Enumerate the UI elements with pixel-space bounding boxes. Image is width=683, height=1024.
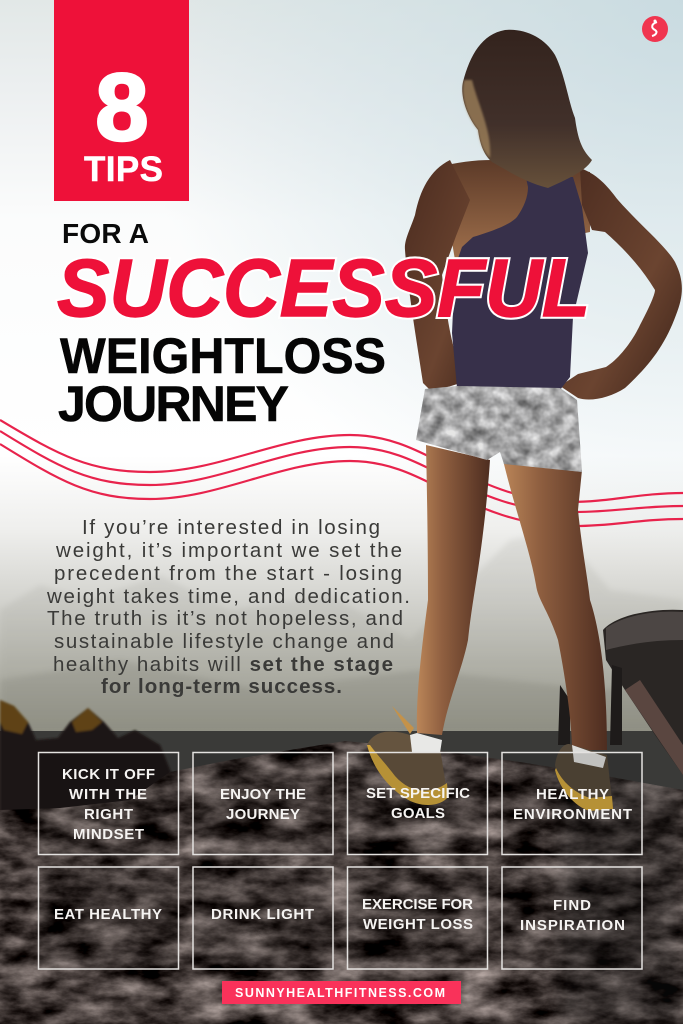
heading: for a: FOR A xyxy=(62,218,149,249)
left arm xyxy=(405,160,492,392)
tip 1: RIGHT xyxy=(84,806,133,823)
intro paragraph: weight takes time, and dedication. xyxy=(46,585,410,608)
right leg xyxy=(503,460,607,750)
intro paragraph: precedent from the start - losing xyxy=(54,562,402,585)
intro paragraph: sustainable lifestyle change and xyxy=(54,630,394,653)
tip 3 xyxy=(348,752,488,854)
woman figure xyxy=(367,30,682,811)
tip 8: FIND xyxy=(553,897,591,914)
tip grid xyxy=(38,752,642,969)
title badge: 8 tips: TIPS xyxy=(84,150,163,189)
footer url badge xyxy=(222,981,461,1004)
right shoe xyxy=(555,744,613,811)
tank top xyxy=(452,160,588,390)
dark horizon band xyxy=(0,731,683,811)
right arm xyxy=(560,168,682,400)
tip 4: ENVIRONMENT xyxy=(513,806,632,823)
intro paragraph: healthy habits will set the stage xyxy=(53,653,393,676)
tip 4 xyxy=(502,752,642,854)
tip 2: JOURNEY xyxy=(226,806,300,823)
tip 1: MINDSET xyxy=(73,826,144,843)
tip 1: KICK IT OFF xyxy=(62,766,155,783)
logo badge xyxy=(642,16,668,42)
rocks xyxy=(0,730,683,1024)
tip 7: EXERCISE FOR xyxy=(362,896,473,913)
tip 7: WEIGHT LOSS xyxy=(363,916,473,933)
title badge: 8 tips xyxy=(54,0,189,201)
left leg xyxy=(417,445,490,735)
tip 1: WITH THE xyxy=(69,786,147,803)
decorative waves xyxy=(0,420,683,526)
tip 6 xyxy=(193,867,333,969)
intro paragraph xyxy=(46,516,410,698)
tip 3: GOALS xyxy=(391,805,445,822)
trees at left xyxy=(0,700,172,815)
tip 5: EAT HEALTHY xyxy=(54,906,162,923)
intro paragraph: If you’re interested in losing xyxy=(82,516,380,539)
intro paragraph: weight, it’s important we set the xyxy=(55,539,402,562)
footer url badge: SUNNYHEALTHFITNESS.COM xyxy=(235,986,445,1000)
tip 2 xyxy=(193,752,333,854)
heading: weightloss journey: WEIGHTLOSS xyxy=(60,328,386,384)
back and shoulders xyxy=(440,160,590,260)
tip 8: INSPIRATION xyxy=(520,917,625,934)
denim shorts xyxy=(416,386,582,472)
intro paragraph: The truth is it’s not hopeless, and xyxy=(47,607,403,630)
tip 5 xyxy=(38,867,178,969)
sunlit hair edge xyxy=(463,80,490,158)
photo background: sky and haze xyxy=(0,0,683,735)
tip 8 xyxy=(502,867,642,969)
heading: weightloss journey: JOURNEY xyxy=(58,376,289,432)
left shoe xyxy=(367,706,448,805)
heading: weightloss journey xyxy=(58,328,386,432)
hair xyxy=(462,30,592,188)
heading: successful: SUCCESSFUL xyxy=(57,243,590,334)
tip 3: SET SPECIFIC xyxy=(366,785,470,802)
heading: successful: SUCCESSFUL xyxy=(57,243,590,334)
title badge: 8 tips: 8 xyxy=(95,54,149,161)
tip 1 xyxy=(38,752,178,854)
tip 4: HEALTHY xyxy=(536,786,609,803)
tip 7 xyxy=(348,867,488,969)
backpack xyxy=(558,610,683,775)
tip 2: ENJOY THE xyxy=(220,786,306,803)
tip 6: DRINK LIGHT xyxy=(211,906,314,923)
intro paragraph: for long-term success. xyxy=(101,675,342,698)
